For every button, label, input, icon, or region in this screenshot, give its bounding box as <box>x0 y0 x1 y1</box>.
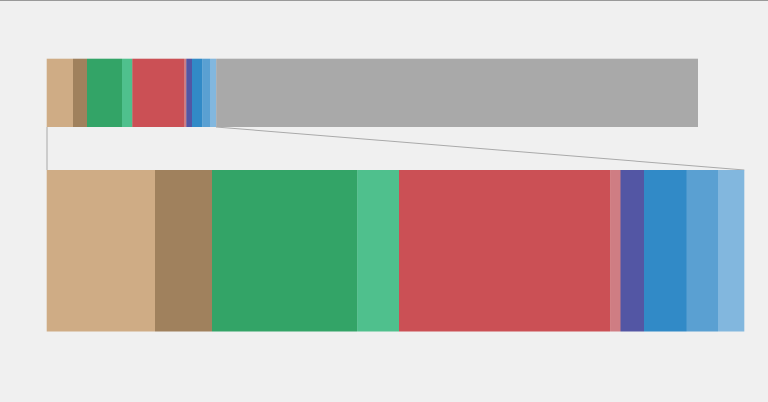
overview stacked bar <box>47 59 698 127</box>
zoom connector lines <box>47 127 744 170</box>
detail stacked bar <box>47 170 744 332</box>
